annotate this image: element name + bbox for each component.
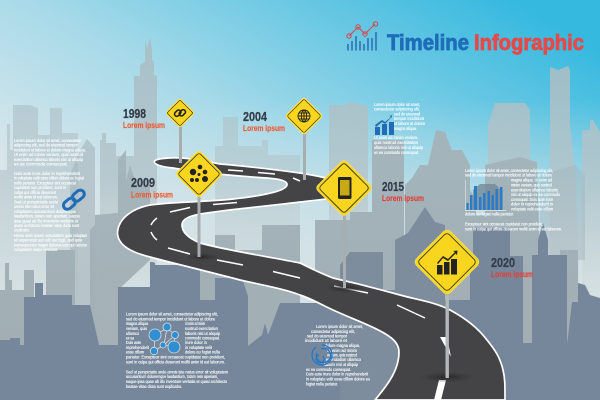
- text block: bottom right: consectetur adipiscing elit,: [311, 329, 355, 334]
- label 2009: [131, 176, 173, 200]
- text block: bottom center: [126, 312, 228, 389]
- text block: bottom center: nostrud exercitation: [185, 326, 219, 331]
- icon: globe: [298, 110, 310, 122]
- text block: left: [14, 138, 88, 252]
- icon: blue chain link: [62, 188, 86, 211]
- text block: right: magna aliqua. Ut enim ad: [511, 178, 553, 183]
- label 2015: [382, 180, 424, 203]
- text block: left: laudantium, totam rem aperiam, eaque: [14, 214, 81, 219]
- text block: right: Lorem ipsum dolor sit amet, consectetur adipiscing elit,: [465, 168, 553, 173]
- text block: upper right: tempor incididunt: [394, 116, 425, 121]
- text block: left: exercitation ullamco laboris nisi ut aliquip: [14, 157, 84, 162]
- text block: left: nulla pariatur. Excepteur sint occaecat: [14, 180, 77, 185]
- skyline: mid buildings: [0, 130, 585, 400]
- text block: bottom right: exercitation ullamco: [326, 357, 362, 362]
- text block: upper right: magna aliqua.: [394, 126, 417, 131]
- text block: left: voluptatem accusantium doloremque: [14, 209, 77, 214]
- text block: left: mollit anim id est laborum.: [14, 194, 58, 200]
- text block: bottom center: beatae vitae dicta sunt explicabo.: [126, 384, 182, 389]
- icon: bar chart: [437, 250, 458, 274]
- title: Timeline: [387, 30, 469, 55]
- text block: upper right: [374, 102, 426, 155]
- sign 2004: globe: [285, 97, 323, 180]
- text block: upper right: Lorem ipsum dolor sit amet,: [374, 102, 420, 107]
- text block: right: voluptate velit esse cillum: [511, 206, 553, 212]
- text block: bottom center: ullamco: [126, 331, 140, 336]
- text block: upper right: Ut enim ad minim veniam,: [374, 135, 418, 140]
- text block: left: in voluptate velit esse cillum dolore eu fugiat: [14, 176, 85, 181]
- text block: left: quasi architecto beatae vitae dicta sunt: [14, 223, 80, 228]
- sign 1998: link: [165, 98, 195, 163]
- text block: right: Excepteur sint occaecat cupidatat non proident,: [465, 221, 543, 226]
- label 2004: 2004: [243, 110, 267, 124]
- text block: right: exercitation ullamco laboris: [511, 187, 558, 192]
- icon: people network: [190, 165, 208, 182]
- road center dashes: [151, 170, 451, 400]
- text block: left: cupidatat non proident, sunt in: [14, 185, 67, 190]
- text block: bottom right: Ut enim ad minim: [327, 348, 357, 353]
- text block: left: voluptatem sequi nesciunt.: [14, 247, 58, 252]
- label 1998: 1998: [123, 107, 146, 121]
- sign 2020: chart: [413, 228, 481, 378]
- text block: bottom right: fugiat nulla pariatur.: [306, 381, 338, 386]
- text block: left: explicabo.: [14, 228, 30, 233]
- text block: bottom right: sed do eiusmod tempor: [307, 334, 348, 338]
- text block: left: omnis iste natus error sit: [14, 204, 55, 209]
- text block: left: culpa qui officia deserunt: [14, 190, 57, 195]
- text block: bottom right: veniam, quis nostrud: [327, 352, 357, 358]
- text block: left: Nemo enim ipsam voluptatem quia voluptas: [14, 233, 87, 238]
- text block: left: ex ea commodo consequat.: [14, 162, 68, 166]
- text block: bottom center: in voluptate velit: [185, 345, 213, 350]
- text block: bottom right: laboris nisi ut aliquip: [324, 362, 359, 367]
- icon: blue radial chart: [312, 345, 332, 365]
- text block: left: consequuntur magni dolores eos qui ratione: [14, 242, 88, 247]
- text block: bottom center: laboris nisi ut aliquip: [185, 331, 221, 336]
- text block: right: [465, 168, 562, 231]
- text block: bottom center: commodo consequat.: [185, 336, 220, 340]
- skyline: near buildings: [0, 207, 600, 400]
- text block: left: Lorem ipsum dolor sit amet, consectetur: [14, 138, 81, 143]
- title accent: Infographic: [474, 30, 584, 55]
- label 2004: [243, 110, 285, 133]
- text block: bottom right: Lorem ipsum dolor sit amet,: [316, 324, 363, 329]
- pole shadows: [185, 253, 475, 382]
- text block: upper right: ut labore et dolore: [394, 121, 426, 126]
- label 2020: [491, 256, 533, 279]
- text block: bottom center: Lorem ipsum dolor sit amet, consectetur adipiscing elit,: [126, 312, 218, 316]
- text block: upper right: quis nostrud exercitation: [374, 140, 419, 145]
- text block: bottom center: magna aliqua: [126, 321, 149, 326]
- text block: right: dolore eu fugiat nulla pariatur.: [465, 211, 514, 216]
- text block: upper right: consectetur adipiscing elit,: [374, 106, 420, 112]
- text block: bottom right: ex ea commodo consequat.: [306, 367, 351, 372]
- text block: left: sit aspernatur aut odit aut fugit, sed quia: [14, 238, 83, 243]
- text block: bottom center: reprehenderit: [126, 345, 150, 350]
- text block: bottom center: veniam, quis: [126, 326, 147, 331]
- sign 2015: phone: [315, 159, 373, 288]
- road: [118, 158, 505, 400]
- text block: bottom center: pariatur. Excepteur sint occaecat cupidatat non proident,: [126, 354, 225, 360]
- icon: phone: [338, 177, 352, 199]
- text block: bottom center: Ut enim ad minim: [185, 321, 205, 326]
- text block: upper right: ullamco laboris nisi ut aliquip: [374, 145, 424, 150]
- text block: right: sunt in culpa qui officia deserunt mollit anim id est laborum.: [465, 226, 562, 231]
- text block: right: dolor in reprehenderit in: [511, 202, 554, 207]
- sign 2009: people network: [175, 150, 223, 257]
- label 2020: Lorem ipsum: [491, 269, 533, 279]
- text block: left: Sed ut perspiciatis unde: [14, 200, 59, 204]
- text block: bottom center: irure dolor in: [185, 340, 208, 345]
- text block: right: sed do eiusmod tempor incididunt ut labore et dolore: [465, 173, 553, 178]
- text block: upper right: sed do eiusmod: [394, 112, 421, 116]
- text block: bottom right: [305, 324, 371, 386]
- text block: bottom center: ex ea: [126, 336, 134, 340]
- text block: left: Ut enim ad minim veniam, quis nostrud: [14, 152, 84, 157]
- text block: bottom center: esse cillum: [126, 350, 144, 355]
- text block: bottom center: dolore eu fugiat nulla: [185, 350, 221, 355]
- icon: blue bar chart: [465, 180, 506, 211]
- icon: link: [174, 109, 186, 117]
- text block: right: consequat. Duis aute irure: [511, 197, 554, 202]
- text block: bottom center: Duis aute: [126, 340, 142, 345]
- text block: left: adipiscing elit, sed do eiusmod tempor: [14, 143, 78, 148]
- icon: blue growth chart: [375, 115, 394, 135]
- text block: bottom center: Sed ut perspiciatis unde omnis iste natus error sit voluptatem: [126, 369, 228, 374]
- text block: bottom center: accusantium doloremque laudantium, totam rem aperiam,: [126, 374, 218, 379]
- text block: bottom center: eaque ipsa quae ab illo inventore veritatis et quasi architecto: [126, 379, 228, 384]
- text block: left: ipsa quae ab illo inventore veritatis et: [14, 218, 79, 223]
- label 2009: Lorem ipsum: [131, 190, 173, 200]
- label 1998: Lorem ipsum: [123, 120, 165, 130]
- label 2015: Lorem ipsum: [382, 193, 424, 203]
- text block: bottom right: dolore magna aliqua.: [325, 343, 360, 348]
- title icon: [347, 22, 378, 50]
- text block: bottom center: sed do eiusmod tempor incididunt ut labore et dolore: [126, 316, 216, 321]
- text block: bottom right: incididunt ut labore et: [305, 338, 348, 343]
- text block: left: incididunt ut labore et dolore magna aliqua.: [14, 147, 86, 152]
- text block: right: minim veniam, quis nostrud: [511, 183, 552, 188]
- text block: bottom right: in voluptate velit esse cillum dolore eu: [306, 376, 371, 382]
- label 2015: 2015: [382, 180, 404, 194]
- text block: bottom right: Duis aute irure dolor in reprehenderit: [306, 372, 369, 377]
- label 1998: [123, 107, 165, 130]
- text block: right: nisi ut aliquip ex ea commodo: [511, 192, 561, 197]
- label 2004: Lorem ipsum: [243, 123, 285, 133]
- icon: blue people network: [149, 323, 180, 355]
- label 2020: 2020: [491, 256, 515, 270]
- label 2009: 2009: [131, 176, 155, 190]
- text block: upper right: ex ea commodo consequat.: [374, 150, 419, 155]
- text block: bottom center: sunt in culpa qui officia deserunt mollit anim id est laborum.: [126, 359, 225, 364]
- text block: left: Duis aute irure dolor in reprehenderit: [14, 171, 81, 176]
